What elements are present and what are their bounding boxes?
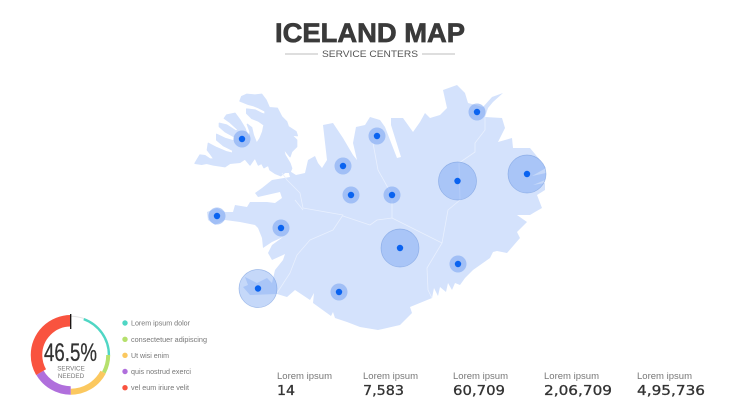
- stat: 14: [277, 371, 332, 399]
- stat: 4,95,736: 4,95,736: [637, 383, 705, 399]
- stat: 7,583: [363, 371, 418, 399]
- stat: 2,06,709: [544, 371, 612, 399]
- legend: vel eum iriure velit: [131, 383, 189, 392]
- donut chart: service needed: [32, 314, 110, 394]
- stat: 60,709: [453, 371, 508, 399]
- subtitle: service centers: SERVICE CENTERS: [322, 49, 418, 59]
- stat: 14: Lorem ipsum: [277, 371, 332, 382]
- stat: 4,95,736: [637, 371, 705, 399]
- bubble: large markers: [239, 155, 546, 308]
- stat: 60,709: Lorem ipsum: [453, 371, 508, 382]
- legend: Lorem ipsum dolor: [131, 318, 191, 328]
- title: ICELAND MAP: [275, 18, 465, 48]
- legend: [122, 318, 207, 392]
- stat: 7,583: 7,583: [363, 383, 404, 399]
- legend: quis nostrud exerci: [131, 367, 191, 376]
- stat: 4,95,736: Lorem ipsum: [637, 371, 692, 382]
- legend: Ut wisi enim: [131, 351, 169, 360]
- stat: 2,06,709: Lorem ipsum: [544, 371, 599, 382]
- donut chart: service needed: SERVICE: [57, 366, 85, 372]
- donut chart: service needed: NEEDED: [58, 373, 85, 380]
- stat: 14: 14: [277, 383, 295, 399]
- legend: consectetuer adipiscing: [131, 335, 207, 344]
- map: Iceland: [195, 85, 546, 330]
- stat: 60,709: 60,709: [453, 383, 505, 399]
- donut chart: service needed: 46.5%: [44, 339, 97, 367]
- stat: 7,583: Lorem ipsum: [363, 371, 418, 382]
- bubble: small markers: [208, 104, 486, 300]
- stat: 2,06,709: 2,06,709: [544, 383, 612, 399]
